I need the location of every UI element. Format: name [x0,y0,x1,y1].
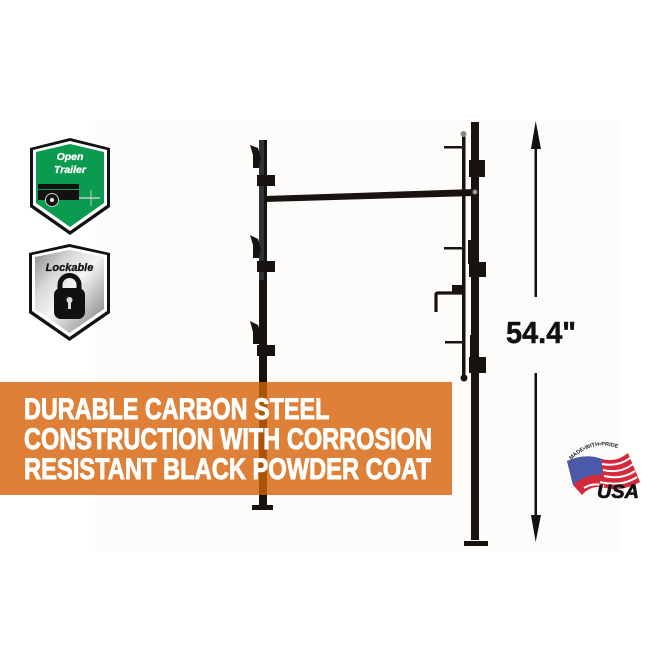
product: right rack post [464,122,488,546]
usa wordmark: USA [597,482,639,503]
badge label: lockable: Lockable [46,262,93,274]
badge label: open trailer: Open [57,151,83,163]
flag canton [567,456,602,485]
badge label: open trailer: Trailer [54,164,87,176]
dimension arrow: lower [531,373,541,542]
banner headline: DURABLE CARBON STEEL [24,393,329,426]
icon: lockable shield badge [29,244,110,341]
dimension arrow: upper [531,121,541,297]
banner headline: CONSTRUCTION WITH CORROSION [24,423,432,456]
orange text banner [0,382,452,495]
icon: padlock [54,276,85,319]
banner headline: RESISTANT BLACK POWDER COAT [24,453,431,486]
product: left rack post [250,140,275,510]
arched tagline: MADE•WITH•PRIDE [568,442,618,460]
icon: open trailer shield badge [30,138,110,235]
flag stripes [567,453,640,495]
icon: made with pride usa flag [567,442,640,503]
product: crossbar [265,189,475,202]
product: thin rod with hooks and handle [436,131,478,382]
dimension label: 54.4" [506,315,576,350]
post seen through banner [259,382,267,495]
icon: trailer silhouette [38,184,100,206]
